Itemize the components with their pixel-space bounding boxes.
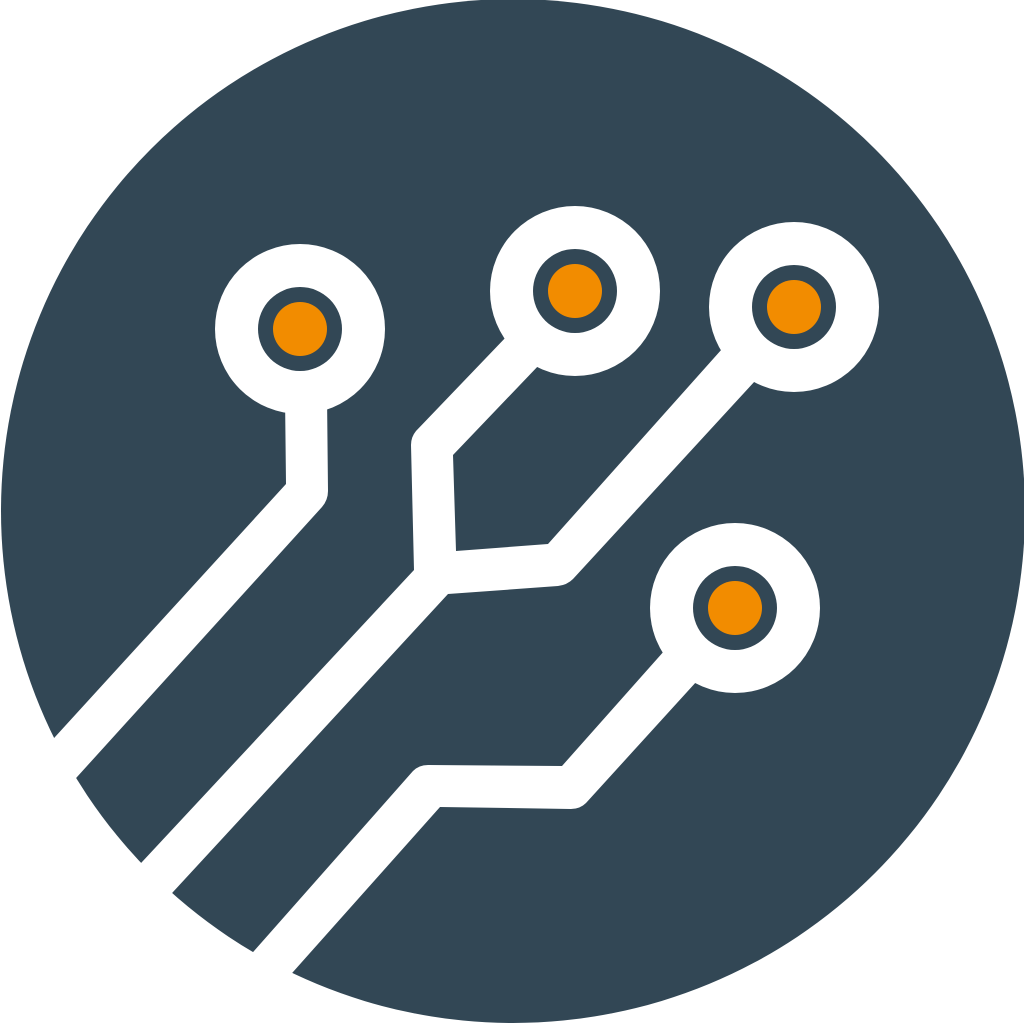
circuit trace: left xyxy=(30,395,328,807)
circuit trace: lower right xyxy=(230,650,697,998)
node: lower right xyxy=(650,523,820,693)
node: top middle xyxy=(490,206,660,376)
node: left xyxy=(215,244,385,414)
node: top right xyxy=(709,222,879,392)
circuit trace: middle branching xyxy=(110,335,755,923)
